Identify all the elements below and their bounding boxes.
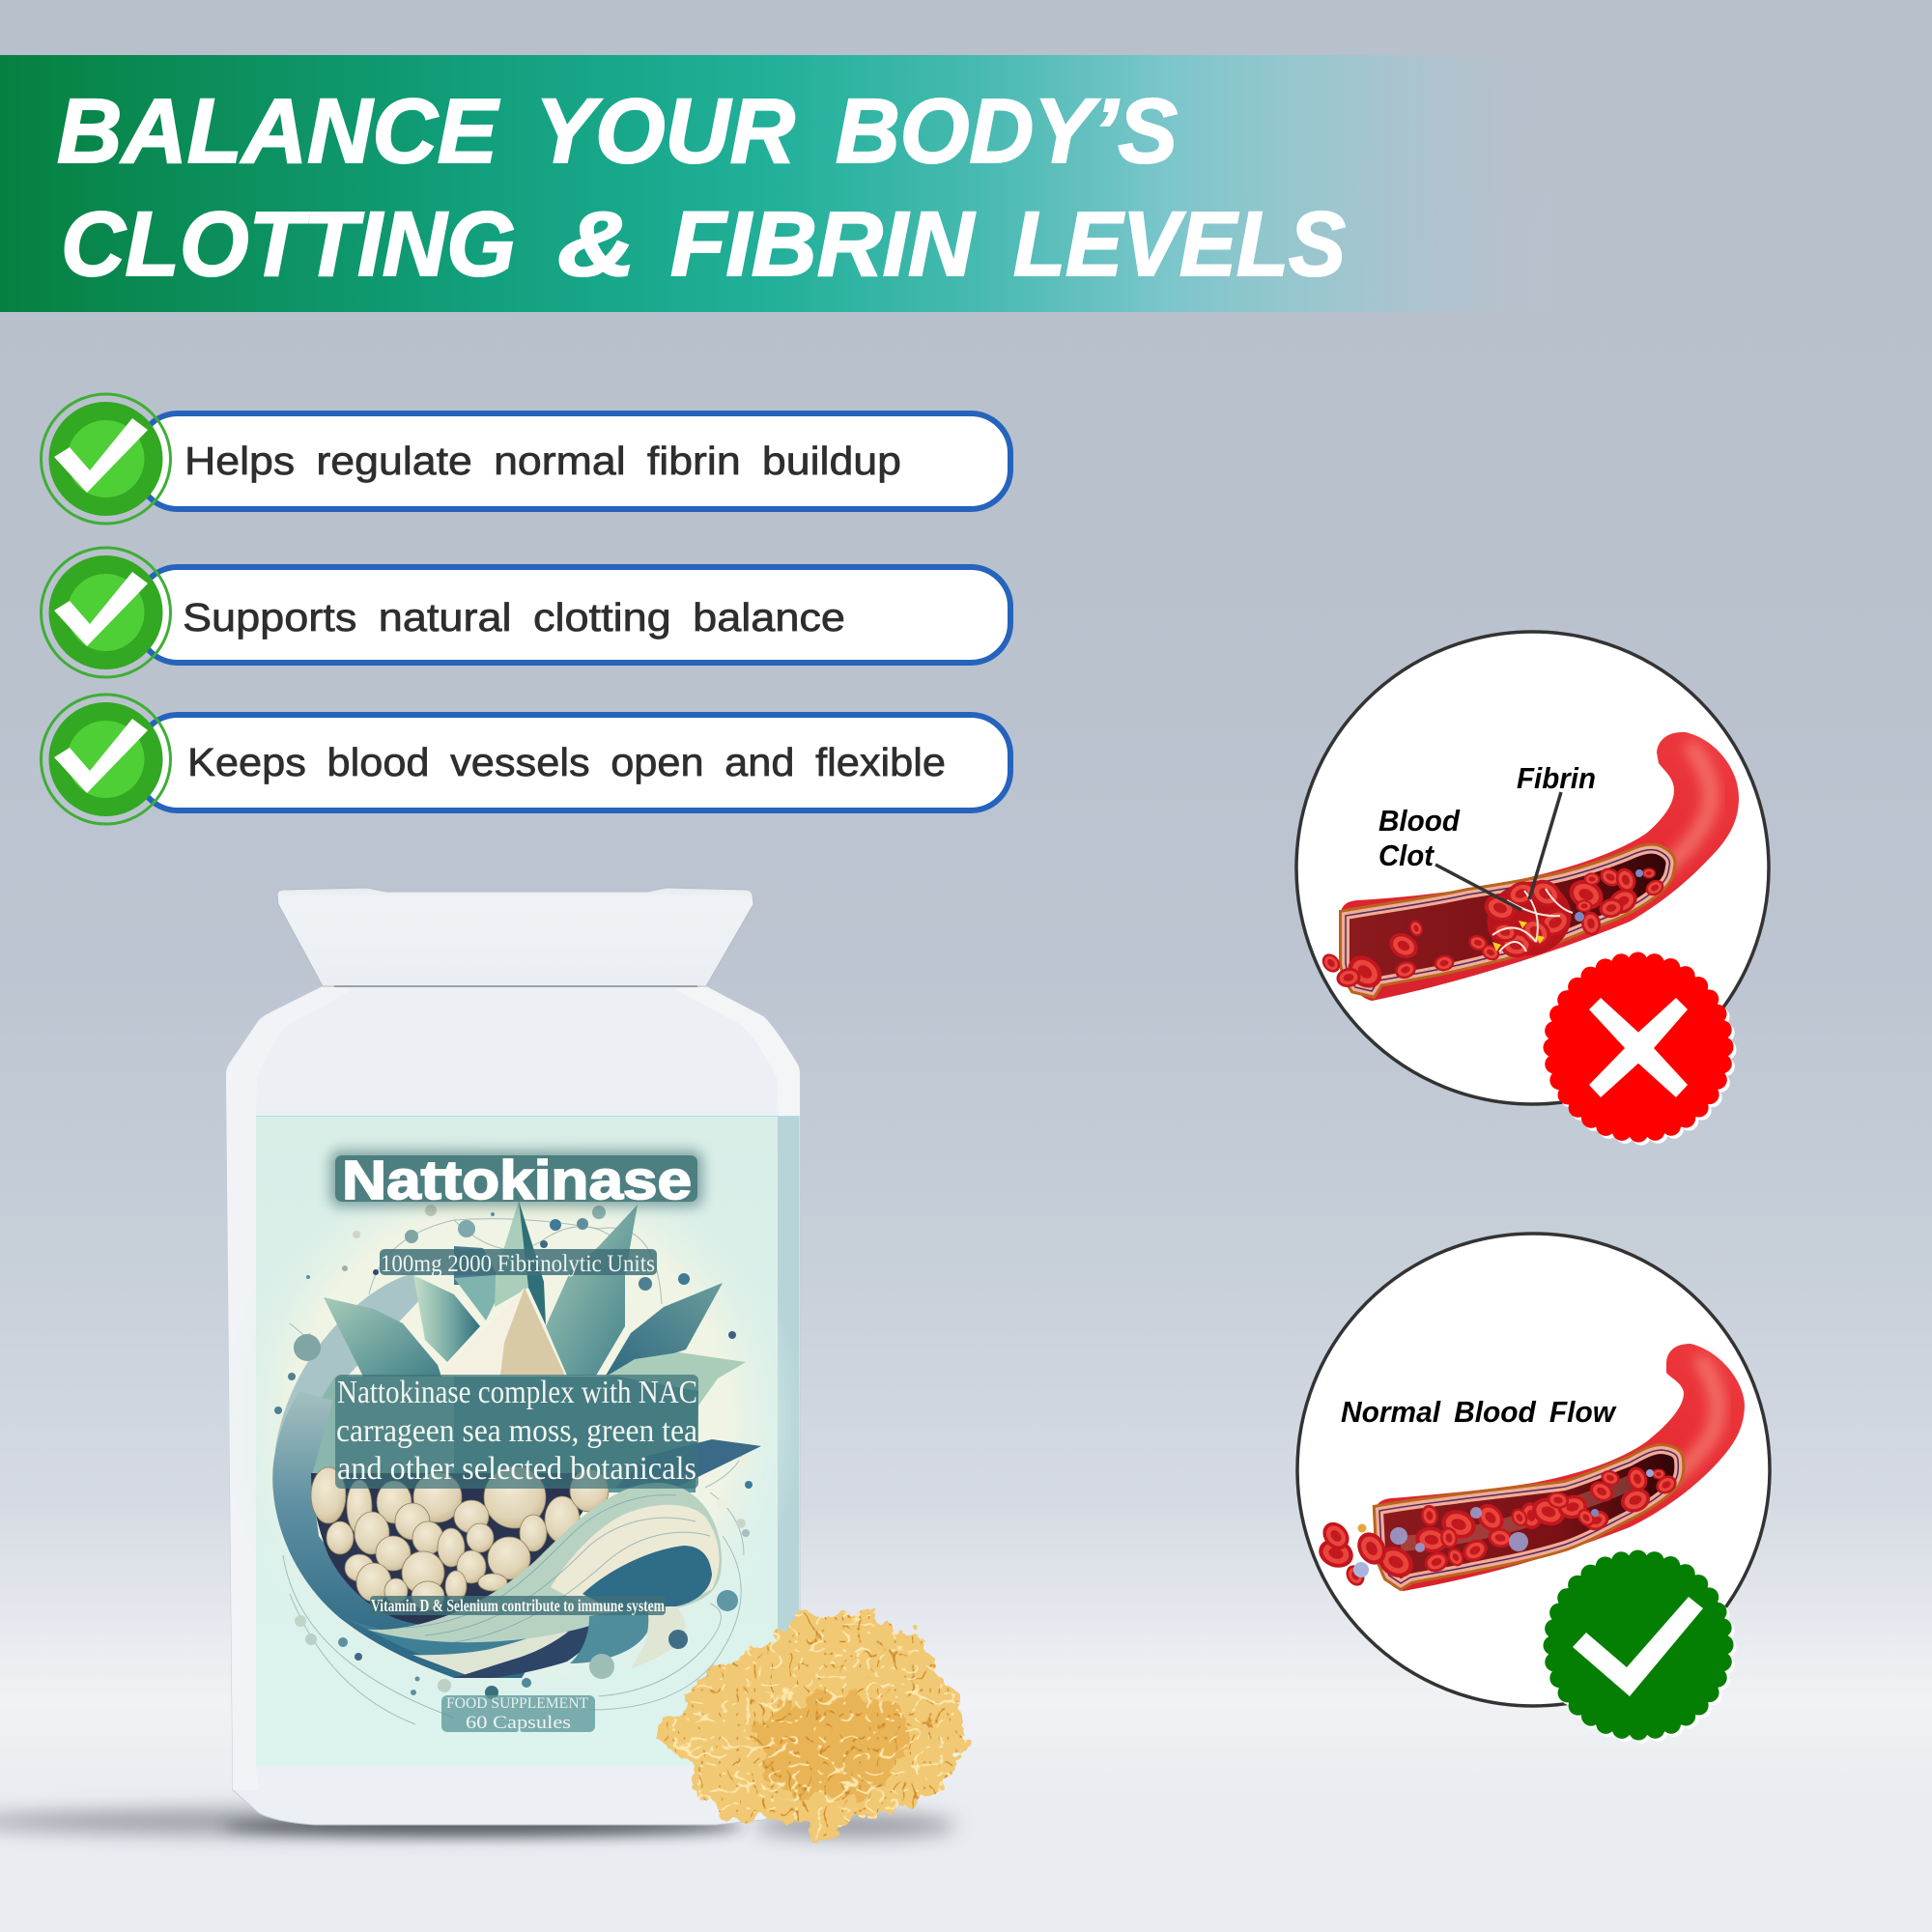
- title: CLOTTING: [61, 193, 516, 296]
- label dose text: 100mg 2000 Fibrinolytic Units: [381, 1251, 655, 1277]
- label: Fibrin: Fibrin: [1517, 761, 1596, 795]
- label particles: [274, 1205, 753, 1699]
- heading banner: [0, 55, 1584, 312]
- icon: check 1: [41, 394, 170, 524]
- label artwork: [272, 1201, 761, 1724]
- icon: green check badge: [1548, 1555, 1731, 1739]
- title: FIBRIN: [670, 193, 976, 296]
- label description text: carrageen sea moss, green tea: [336, 1413, 697, 1449]
- label: Normal Blood Flow: Normal Blood Flow: [1341, 1395, 1617, 1429]
- label capsule count: 60 Capsules: [466, 1713, 571, 1733]
- benefit row 2: [41, 548, 1010, 677]
- blood clot mass: [1479, 872, 1579, 965]
- benefit row 1: [41, 394, 1010, 524]
- label capsule count: [441, 1695, 595, 1733]
- panel: normal flow circle: [1297, 1234, 1770, 1739]
- title: BALANCE: [57, 80, 500, 183]
- label immune text: Vitamin D & Selenium contribute to immune system: [371, 1596, 665, 1615]
- product label: [222, 1116, 802, 1766]
- icon: red cross badge: [1548, 956, 1731, 1140]
- label: Blood Clot: Clot: [1378, 838, 1435, 872]
- label title: Nattokinase: Nattokinase: [342, 1150, 692, 1211]
- benefit row 3: [41, 695, 1010, 824]
- title: &: [557, 193, 636, 296]
- benefit text 1: Helps regulate normal fibrin buildup: [185, 439, 901, 483]
- floor shadow: [0, 1808, 956, 1837]
- bottle body: [226, 986, 800, 1825]
- label: Blood Clot: [1378, 804, 1461, 872]
- benefit text 2: Supports natural clotting balance: [183, 595, 845, 639]
- leaves: [273, 1201, 761, 1492]
- label description text: [335, 1375, 698, 1489]
- panel: blood clot circle: [1296, 632, 1769, 1140]
- illustration: normal vessel: [1315, 1344, 1745, 1591]
- leader lines: [1435, 792, 1561, 910]
- label capsule count: FOOD SUPPLEMENT: [446, 1695, 588, 1712]
- swirl and beans: [272, 1391, 722, 1678]
- bottle cap: [277, 888, 753, 987]
- label: Blood Clot: Blood: [1378, 804, 1461, 838]
- icon: check 2: [41, 548, 170, 677]
- title: [57, 80, 1346, 296]
- title: LEVELS: [1013, 193, 1346, 296]
- sea moss: [655, 1610, 966, 1840]
- title: BODY’S: [836, 80, 1178, 183]
- title: YOUR: [535, 80, 795, 183]
- benefit text 3: Keeps blood vessels open and flexible: [187, 740, 946, 784]
- product bottle: [222, 888, 802, 1825]
- label description text: Nattokinase complex with NAC: [337, 1375, 697, 1410]
- label description text: and other selected botanicals: [337, 1451, 696, 1487]
- illustration: clotted vessel: [1319, 732, 1739, 1001]
- icon: check 3: [41, 695, 170, 824]
